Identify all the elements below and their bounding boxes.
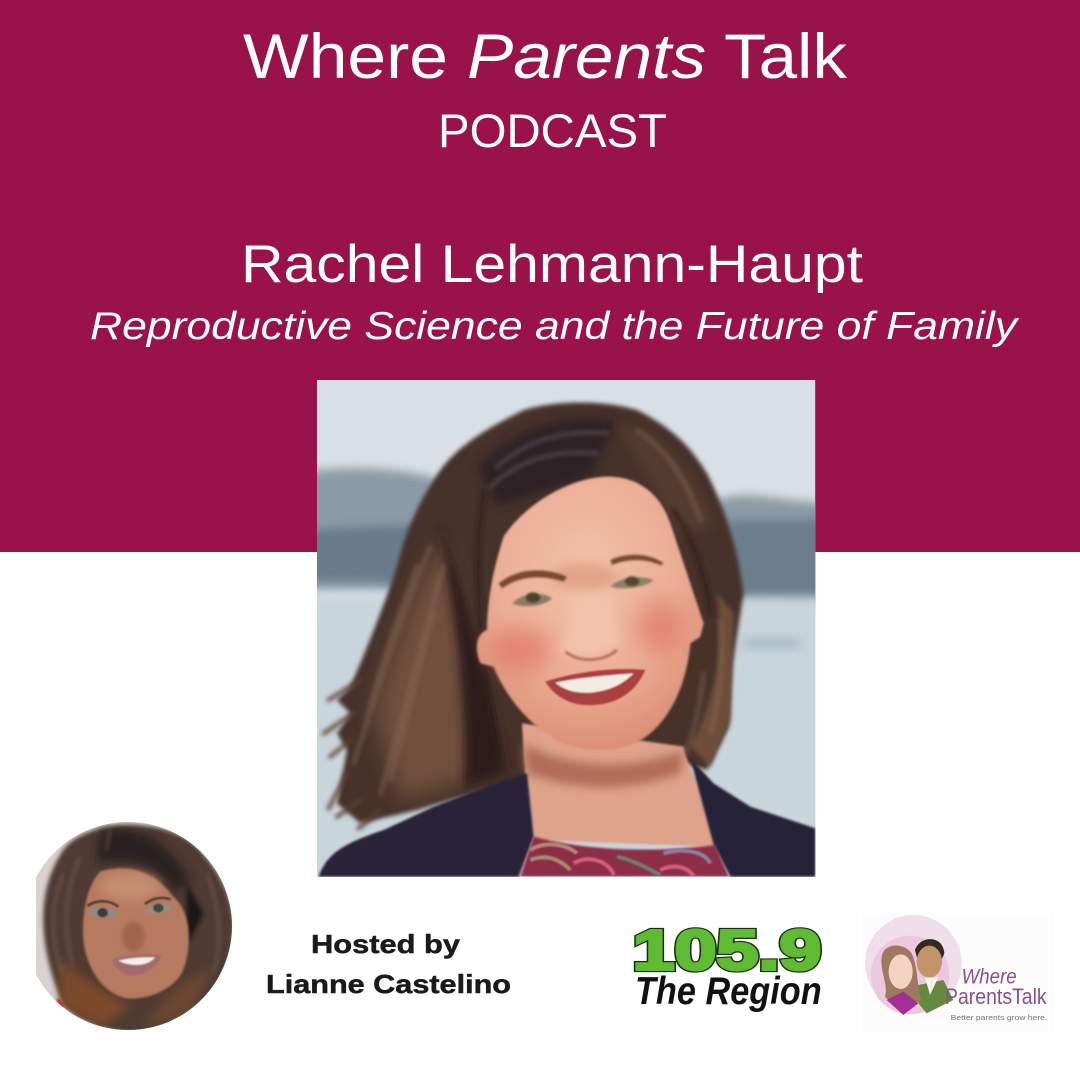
guest portrait photo bbox=[297, 380, 837, 897]
nose bbox=[562, 600, 620, 656]
logo: Where Parents Talk: Better parents grow here. bbox=[951, 1015, 1047, 1022]
logo: Where Parents Talk bbox=[862, 913, 1053, 1032]
woman figure bbox=[881, 946, 922, 1012]
logo: Where Parents Talk: ParentsTalk bbox=[945, 984, 1048, 1009]
logo: Where Parents Talk: Where bbox=[962, 964, 1017, 988]
host eyes bbox=[87, 898, 172, 918]
hosted by: Hosted by bbox=[311, 929, 461, 959]
subtitle: podcast: PODCAST bbox=[438, 104, 667, 157]
jacket bbox=[319, 773, 534, 877]
header band bbox=[0, 0, 1080, 552]
title: Where bbox=[243, 22, 448, 92]
host mouth bbox=[112, 954, 162, 975]
guest name: Rachel Lehmann-Haupt bbox=[241, 235, 863, 294]
hosted by bbox=[266, 929, 511, 999]
host face bbox=[83, 868, 189, 999]
hair strands bbox=[324, 430, 722, 828]
hosted by: Lianne Castelino bbox=[266, 969, 511, 999]
host portrait bbox=[20, 817, 240, 1037]
eyebrows bbox=[499, 570, 567, 588]
logo: 105.9 The Region bbox=[633, 919, 822, 1013]
title bbox=[243, 22, 848, 92]
logo: 105.9 The Region: 105.9 bbox=[633, 919, 821, 982]
title: Parents bbox=[467, 22, 706, 92]
face bbox=[477, 477, 704, 750]
episode title: Reproductive Science and the Future of Family bbox=[90, 305, 1020, 348]
mouth bbox=[545, 669, 645, 705]
logo: 105.9 The Region: The Region bbox=[635, 969, 822, 1013]
man figure bbox=[915, 939, 944, 963]
hair bbox=[337, 402, 744, 823]
eyes bbox=[512, 576, 654, 606]
title: Talk bbox=[724, 22, 848, 92]
neck bbox=[522, 723, 714, 847]
logo: 105.9 The Region: 105.9 bbox=[633, 919, 821, 982]
blouse bbox=[520, 837, 729, 877]
